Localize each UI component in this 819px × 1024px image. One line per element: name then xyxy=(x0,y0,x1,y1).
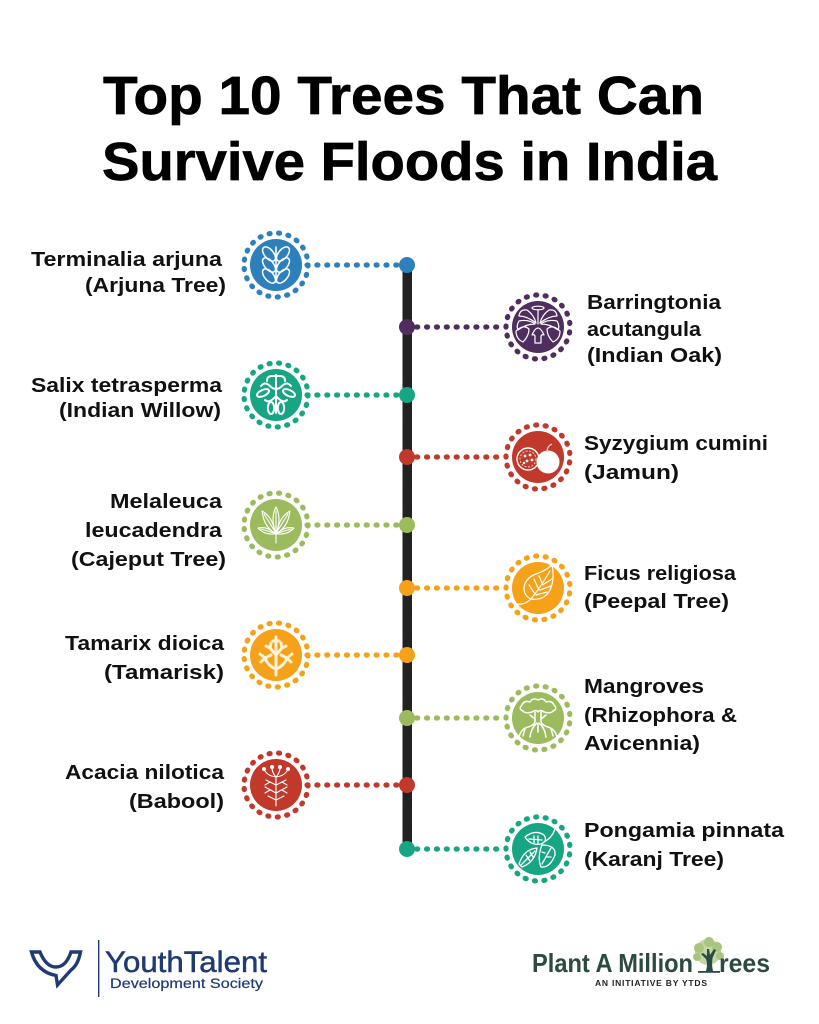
item: Salix tetrasperma xyxy=(31,363,415,427)
label: (Peepal Tree) xyxy=(584,590,729,613)
title xyxy=(102,66,718,192)
timeline spine xyxy=(402,265,412,849)
label xyxy=(584,562,737,613)
label: acutangula xyxy=(587,318,702,341)
label: Terminalia arjuna xyxy=(31,248,223,271)
logo text: Plant A Million xyxy=(532,948,693,978)
connector and node xyxy=(399,449,498,465)
item: Ficus religiosa xyxy=(399,556,737,620)
icon: willow branch xyxy=(244,363,308,427)
icon: mangrove tree xyxy=(506,686,570,750)
connector and node xyxy=(307,777,415,793)
label xyxy=(587,291,722,367)
icon: tamarisk tree xyxy=(244,623,308,687)
icon: arjuna leaves xyxy=(244,233,308,297)
icon: babool branch xyxy=(244,753,308,817)
label xyxy=(31,248,226,297)
logo text: AN INITIATIVE BY YTDS xyxy=(595,978,707,988)
item: Acacia nilotica xyxy=(65,753,415,817)
label: (Arjuna Tree) xyxy=(85,274,226,297)
icon: karanj leaves and pods xyxy=(506,817,570,881)
label: (Cajeput Tree) xyxy=(71,548,226,571)
label: Tamarix dioica xyxy=(65,632,225,655)
connector and node xyxy=(307,517,415,533)
item: Syzygium cumini xyxy=(399,425,768,489)
title: Survive Floods in India xyxy=(102,132,718,192)
connector and node xyxy=(399,580,498,596)
icon: youth talent emblem xyxy=(32,952,80,985)
label xyxy=(584,675,737,755)
label: Avicennia) xyxy=(584,732,700,755)
label xyxy=(31,374,223,422)
logo: Plant A Million Trees xyxy=(532,937,770,988)
connector and node xyxy=(307,257,415,273)
label: (Rhizophora & xyxy=(584,704,737,727)
connector and node xyxy=(307,387,415,403)
label: Mangroves xyxy=(584,675,704,698)
label: Salix tetrasperma xyxy=(31,374,223,397)
label xyxy=(584,432,768,484)
label: (Indian Oak) xyxy=(587,344,722,367)
logo text: rees xyxy=(719,948,770,978)
logo text: Development Society xyxy=(110,976,263,991)
label xyxy=(65,632,225,684)
icon: barringtonia flower xyxy=(506,295,570,359)
item: Mangroves xyxy=(399,675,737,755)
item: Terminalia arjuna xyxy=(31,233,415,297)
item: Barringtonia acutangula xyxy=(399,291,722,367)
icon: tree crown and trunk xyxy=(693,937,724,973)
item: Tamarix dioica xyxy=(65,623,415,687)
label: Ficus religiosa xyxy=(584,562,737,585)
label: (Karanj Tree) xyxy=(584,848,724,871)
label: (Indian Willow) xyxy=(59,399,221,422)
item: Melaleuca leucadendra xyxy=(71,490,415,571)
label: (Babool) xyxy=(129,790,224,813)
label: Syzygium cumini xyxy=(584,432,768,455)
label: (Jamun) xyxy=(584,461,679,484)
logo text xyxy=(532,948,770,988)
logo: Youth Talent Development Society xyxy=(32,940,268,997)
label: (Tamarisk) xyxy=(104,661,224,684)
icon: jamun fruit xyxy=(506,425,570,489)
label xyxy=(71,490,226,571)
label: Barringtonia xyxy=(587,291,722,314)
connector and node xyxy=(399,710,498,726)
label: Melaleuca xyxy=(110,490,223,513)
logo text: YouthTalent xyxy=(105,946,268,979)
connector and node xyxy=(399,841,498,857)
label xyxy=(65,761,225,813)
title: Top 10 Trees That Can xyxy=(103,66,704,126)
icon: peepal leaf xyxy=(506,556,570,620)
item: Pongamia pinnata xyxy=(399,817,785,881)
connector and node xyxy=(399,319,498,335)
icon: cajeput leaves xyxy=(244,493,308,557)
connector and node xyxy=(307,647,415,663)
label: Acacia nilotica xyxy=(65,761,225,784)
label xyxy=(584,819,785,871)
label: leucadendra xyxy=(85,519,223,542)
label: Pongamia pinnata xyxy=(584,819,785,842)
